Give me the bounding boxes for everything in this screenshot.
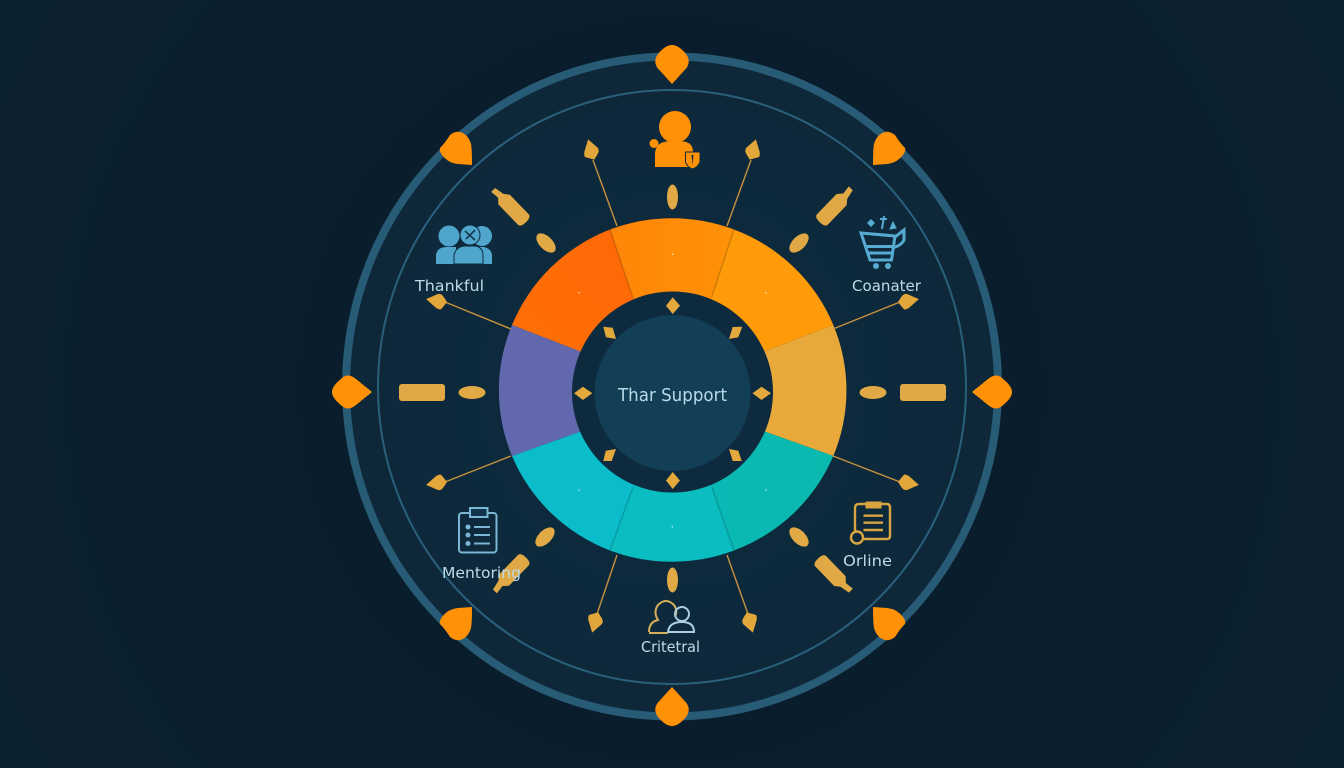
segment: top right	[672, 230, 833, 392]
label: Critetral: Critetral	[641, 638, 700, 656]
arrow: down right	[727, 555, 759, 634]
center title: Thar Support	[617, 386, 727, 406]
arrow: left lower	[424, 456, 511, 493]
segment: top	[610, 218, 734, 392]
icon: people outline	[649, 601, 694, 633]
arrow: up right	[727, 138, 762, 226]
segment specks	[578, 254, 767, 528]
bottle: bottom right	[813, 553, 855, 597]
segmented donut chart	[499, 218, 846, 562]
marker: bottom	[655, 687, 689, 726]
marker: bottom right	[873, 607, 905, 640]
label: Orline: Orline	[843, 552, 892, 570]
arrow: right lower	[833, 456, 921, 493]
segment shading lines	[610, 230, 734, 550]
label: Mentoring: Mentoring	[442, 564, 521, 582]
ring markers	[332, 45, 1012, 726]
segment: top left	[512, 230, 672, 392]
donut hole	[572, 292, 773, 492]
icon: shopping cart	[861, 216, 904, 269]
bottle: top right	[814, 184, 857, 227]
bottle: top left	[489, 184, 531, 227]
arrow: down left	[586, 555, 617, 634]
gold tick marks	[399, 184, 946, 597]
segment: bottom	[610, 392, 734, 562]
icon: person with shield	[650, 111, 700, 169]
bottle: bottom left	[489, 552, 531, 596]
segment: bottom left	[512, 392, 672, 550]
outer ring	[346, 56, 998, 716]
marker: right	[972, 375, 1012, 409]
marker: bottom left	[440, 607, 472, 640]
icon: people group	[436, 225, 492, 264]
segment: right	[672, 325, 846, 456]
marker: top left	[440, 132, 472, 165]
connector arrows	[424, 138, 921, 634]
marker: top	[655, 45, 689, 84]
arrow: right upper	[833, 291, 921, 329]
inner ring	[378, 90, 966, 684]
bar: right	[900, 384, 946, 401]
marker: top right	[873, 132, 905, 165]
segment: left	[499, 325, 672, 456]
arrow: up left	[582, 138, 617, 226]
center hub	[594, 315, 750, 471]
bar: left	[399, 384, 445, 401]
marker: left	[332, 375, 372, 409]
segment: bottom right	[672, 392, 833, 550]
arrow: left upper	[424, 291, 511, 329]
label: Thankful: Thankful	[414, 277, 484, 295]
hub diamonds	[574, 297, 771, 489]
label: Coanater: Coanater	[852, 277, 922, 295]
icon: checklist clipboard	[459, 508, 496, 552]
icon: gold clipboard	[851, 502, 890, 544]
